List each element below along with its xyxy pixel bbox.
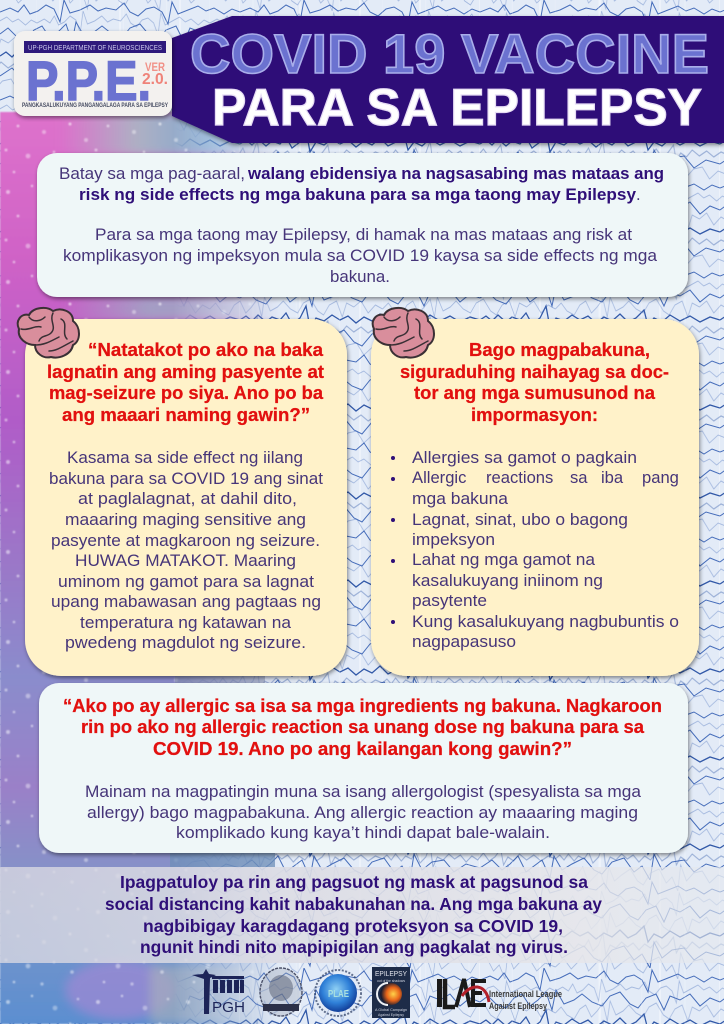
panel: introduction: . (636, 185, 641, 204)
logo: Epilepsy out of the shadows: EPILEPSY (375, 969, 407, 978)
question: fever (47, 339, 324, 425)
answer: fever: pwedeng magdulot ng seizure. (65, 633, 306, 652)
header banner (172, 16, 724, 143)
title: PARA SA EPILEPSY (212, 78, 702, 136)
bullet list: Allergies sa gamot o pagkain (412, 448, 637, 467)
bullet list: pasytente (412, 591, 487, 610)
answer: fever: pasyente at magkaroon ng seizure. (51, 531, 320, 550)
heading: before vaccination: impormasyon: (471, 404, 598, 425)
bullet list: Lahat ng mga gamot na (412, 550, 596, 569)
question: fever: mag-seizure po siya. Ano po ba (49, 382, 324, 403)
bullet list: mga bakuna (412, 489, 509, 508)
bullet list: kasalukuyang iniinom ng (412, 571, 603, 590)
panel: introduction: walang ebidensiya na nagsasabing mas mataas ang (247, 164, 664, 183)
heading: before vaccination: Bago magpabakuna, (469, 339, 650, 360)
bullet list: Lagnat, sinat, ubo o bagong (412, 510, 628, 529)
logo: ILAE: International League (489, 989, 562, 1000)
logo: PGH: PGH (212, 999, 245, 1016)
question: fever: “Natatakot po ako na baka (88, 339, 324, 360)
bullet list: nagpapasuso (412, 632, 516, 651)
answer: fever: Kasama sa side effect ng iilang (67, 448, 303, 467)
panel: introduction: Batay sa mga pag-aaral, (59, 164, 245, 183)
answer: allergy: komplikado kung kaya’t hindi dapat bale-walain. (176, 823, 550, 842)
panel: allergy question (39, 683, 688, 853)
answer: fever (49, 448, 323, 652)
band: closing reminder: social distancing kahit nabakunahan na. Ang mga bakuna ay (105, 894, 602, 914)
band: closing reminder: ngunit hindi nito mapipigilan ang pagkalat ng virus. (140, 937, 568, 957)
logo: P.P.E. ver 2.0: VER (145, 60, 165, 74)
background: nebula (0, 112, 280, 1024)
heading: before vaccination: siguraduhing naihayag sa doc- (400, 361, 669, 382)
heading: before vaccination (400, 339, 669, 425)
band: closing reminder: Ipagpatuloy pa rin ang pagsuot ng mask at pagsunod sa (120, 872, 588, 892)
logo: ILAE (437, 979, 562, 1012)
band: closing reminder: nagbibigay karagdagang proteksyon sa COVID 19, (143, 916, 563, 936)
background: lower nebula strip (170, 676, 275, 867)
answer: fever: HUWAG MATAKOT. Maaring (75, 551, 296, 570)
answer: fever: uminom ng gamot para sa lagnat (58, 572, 314, 591)
logo: PGH (192, 969, 245, 1016)
question: allergy: COVID 19. Ano po ang kailangan kong gawin?” (153, 738, 572, 759)
bullet list: Allergic (412, 468, 466, 487)
logo: Epilepsy out of the shadows: out of the shadows (377, 978, 405, 983)
logo: Philippine League Against Epilepsy: PLAE (328, 989, 349, 1000)
question: allergy: rin po ako ng allergic reaction sa unang dose ng bakuna para sa (81, 716, 645, 737)
answer: allergy: Mainam na magpatingin muna sa isang allergologist (spesyalista sa mga (85, 782, 642, 801)
logo: ILAE: Against Epilepsy (489, 1001, 548, 1012)
logo: P.P.E. ver 2.0: P.P.E. (26, 49, 151, 112)
panel: fever question (25, 319, 347, 676)
bullet list: sa (570, 468, 588, 487)
answer: fever: at paglalagnat, at dahil dito, (78, 489, 297, 508)
answer: allergy (85, 782, 642, 842)
panel: introduction: bakuna. (330, 267, 390, 286)
logo: Epilepsy out of the shadows (372, 967, 410, 1018)
title: COVID 19 VACCINE (190, 23, 709, 85)
bullet list: pang (642, 468, 679, 487)
answer: allergy: allergy) bago magpabakuna. Ang allergic reaction ay maaaring maging (87, 803, 638, 822)
logo: Epilepsy out of the shadows: A Global Campaign (375, 1007, 407, 1012)
logo: P.P.E. ver 2.0: PANGKASALUKUYANG PANGANGALAGA PARA SA EPILEPSY (22, 103, 168, 109)
panel: introduction (37, 153, 688, 297)
question: allergy: “Ako po ay allergic sa isa sa mga ingredients ng bakuna. Nagkaroon (63, 695, 662, 716)
answer: fever: upang mabawasan ang pagtaas ng (51, 592, 321, 611)
icon: brain right (373, 308, 434, 358)
logo: P.P.E. ver 2.0: UP-PGH DEPARTMENT OF NEUROSCIENCES (28, 45, 162, 52)
bullet list: Kung kasalukuyang nagbubuntis o (412, 612, 679, 631)
band: closing reminder (0, 867, 724, 963)
panel: introduction: Para sa mga taong may Epilepsy, di hamak na mas mataas ang risk at (95, 225, 632, 244)
panel: introduction: risk ng side effects ng mga bakuna para sa mga taong may Epilepsy (79, 185, 637, 204)
logo: Philippine League Against Epilepsy (315, 970, 361, 1016)
logo: university seal (260, 968, 302, 1016)
bullet list: impeksyon (412, 530, 495, 549)
answer: fever: temperatura ng katawan na (80, 613, 292, 632)
bullet list: reactions (486, 468, 553, 487)
heading: before vaccination: tor ang mga sumusunod na (414, 382, 656, 403)
logo: Epilepsy out of the shadows: Against Epilepsy (378, 1012, 404, 1017)
title (190, 23, 709, 136)
question: fever: lagnatin ang aming pasyente at (47, 361, 324, 382)
bullet list: iba (601, 468, 624, 487)
panel: before vaccination checklist (371, 319, 699, 676)
logo: P.P.E. ver 2.0: 2.0. (142, 71, 168, 88)
answer: fever: bakuna para sa COVID 19 ang sinat (49, 469, 323, 488)
bullet list (391, 448, 679, 651)
answer: fever: maaaring maging sensitive ang (65, 510, 306, 529)
icon: brain left (18, 308, 79, 358)
logo: P.P.E. ver 2.0 (14, 31, 172, 116)
panel: introduction: komplikasyon ng impeksyon mula sa COVID 19 kaysa sa side effects ng mga (63, 246, 658, 265)
question: fever: ang maaari naming gawin?” (62, 404, 310, 425)
question: allergy (63, 695, 662, 759)
